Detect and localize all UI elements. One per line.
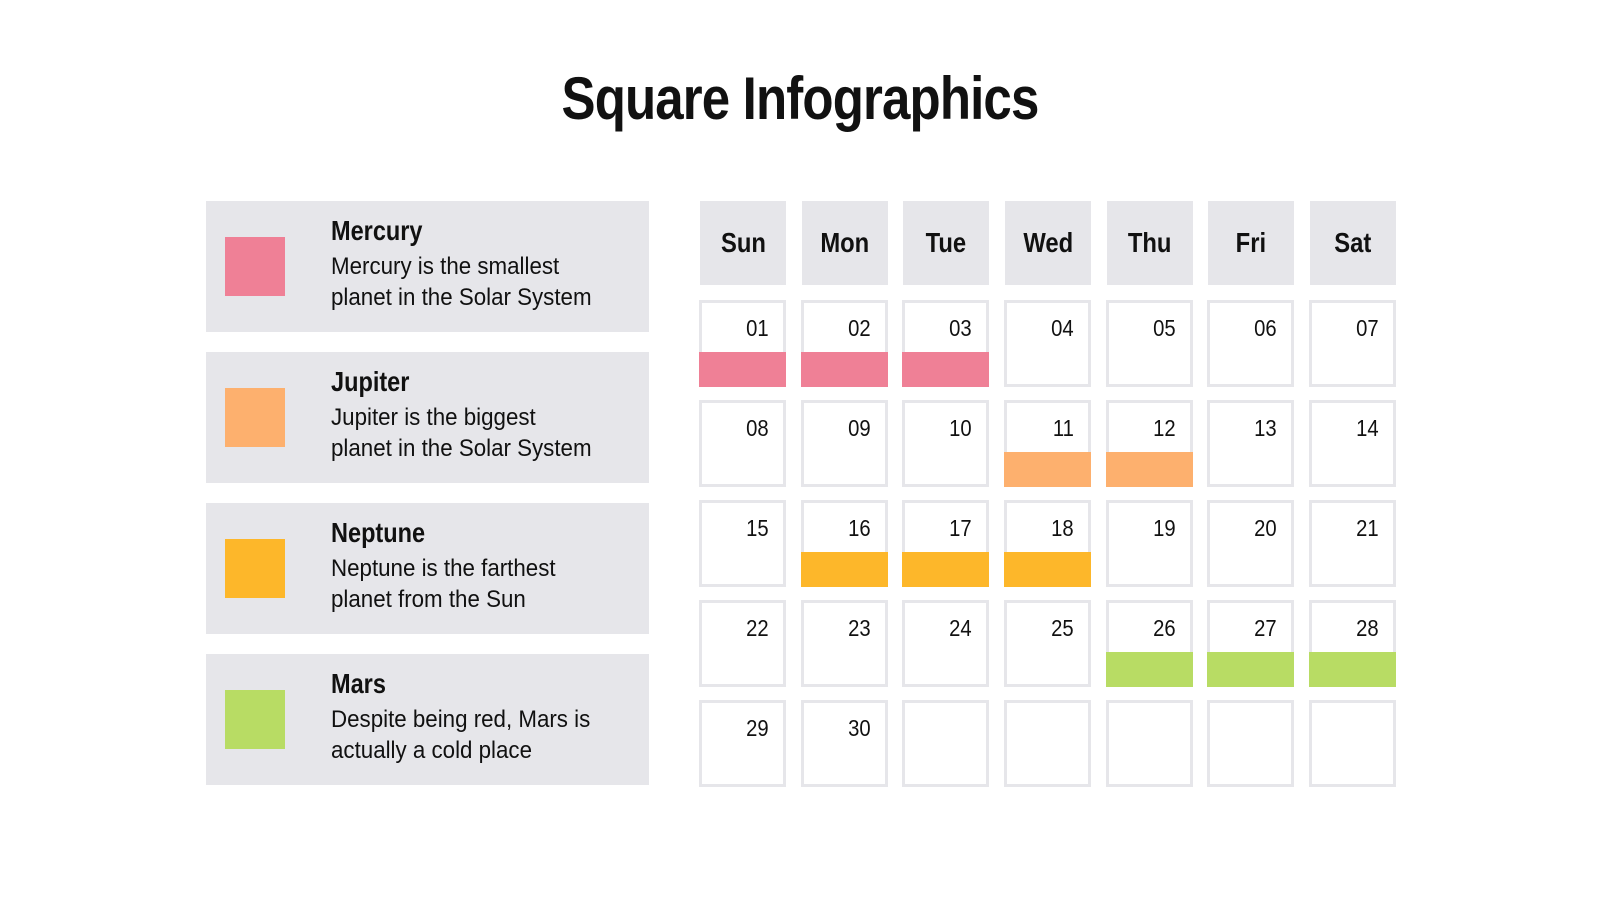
calendar: 20 xyxy=(1254,515,1277,541)
calendar: Sun xyxy=(721,227,765,258)
calendar: 04 xyxy=(1051,315,1074,341)
calendar: Thu xyxy=(1128,227,1172,258)
calendar: 14 xyxy=(1356,415,1379,441)
panel: Jupiter: Jupiter is the biggest xyxy=(331,404,536,431)
panel: Mercury xyxy=(206,201,649,332)
calendar: 08 xyxy=(746,415,769,441)
calendar: 30 xyxy=(848,715,871,741)
panel: Mercury: planet in the Solar System xyxy=(331,284,592,311)
panel: Neptune: Neptune is the farthest xyxy=(331,555,556,582)
panel: Neptune: planet from the Sun xyxy=(331,586,526,613)
panel: Mercury: Mercury xyxy=(331,215,423,246)
calendar: 29 xyxy=(746,715,769,741)
calendar: Tue xyxy=(926,227,966,258)
calendar: Sat xyxy=(1334,227,1372,258)
calendar: 01 xyxy=(746,315,769,341)
calendar: 25 xyxy=(1051,615,1074,641)
calendar: 17 xyxy=(949,515,972,541)
panel: Neptune xyxy=(206,503,649,634)
panel: Mars: Despite being red, Mars is xyxy=(331,706,590,733)
calendar: 09 xyxy=(848,415,871,441)
calendar: 27 xyxy=(1254,615,1277,641)
calendar: Fri xyxy=(1236,227,1266,258)
panel: Mars xyxy=(206,654,649,785)
calendar: 06 xyxy=(1254,315,1277,341)
calendar: 23 xyxy=(848,615,871,641)
panel: Mars: actually a cold place xyxy=(331,737,532,764)
calendar: 26 xyxy=(1153,615,1176,641)
calendar: 24 xyxy=(949,615,972,641)
panel: Jupiter: Jupiter xyxy=(331,366,409,397)
calendar: 28 xyxy=(1356,615,1379,641)
calendar: 05 xyxy=(1153,315,1176,341)
calendar: 13 xyxy=(1254,415,1277,441)
title: Square Infographics xyxy=(562,65,1038,132)
calendar: 12 xyxy=(1153,415,1176,441)
calendar: 18 xyxy=(1051,515,1074,541)
calendar: 03 xyxy=(949,315,972,341)
calendar: 15 xyxy=(746,515,769,541)
panel: Neptune: Neptune xyxy=(331,517,425,548)
calendar: 07 xyxy=(1356,315,1379,341)
calendar: 16 xyxy=(848,515,871,541)
calendar: 21 xyxy=(1356,515,1379,541)
calendar: 22 xyxy=(746,615,769,641)
calendar: 11 xyxy=(1053,415,1074,441)
calendar: 19 xyxy=(1153,515,1176,541)
calendar: Wed xyxy=(1023,227,1073,258)
panel: Jupiter: planet in the Solar System xyxy=(331,435,592,462)
panel: Mercury: Mercury is the smallest xyxy=(331,253,559,280)
calendar: 02 xyxy=(848,315,871,341)
calendar: Mon xyxy=(821,227,869,258)
calendar: 10 xyxy=(949,415,972,441)
panel: Jupiter xyxy=(206,352,649,483)
panel: Mars: Mars xyxy=(331,668,386,699)
